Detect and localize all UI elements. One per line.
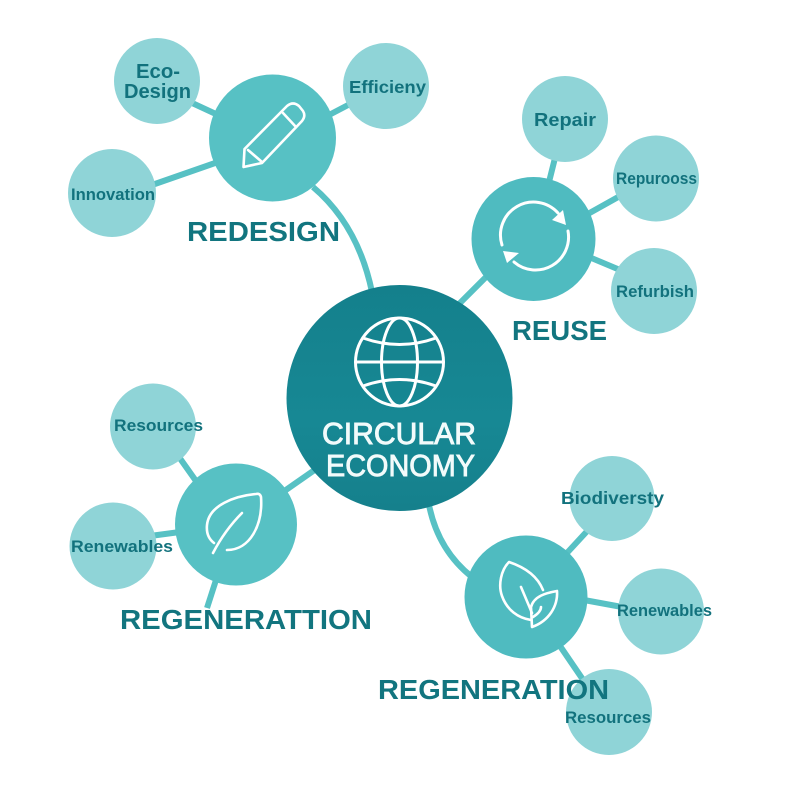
node: renewables	[70, 502, 173, 590]
node: innovation: Innovation	[71, 185, 155, 204]
heading: regeneration right: REGENERATION	[378, 674, 609, 705]
node: efficiency	[343, 43, 429, 129]
connector: renewables	[150, 532, 180, 536]
panel: regeneration branch left	[70, 384, 372, 635]
connector: reuse to centre	[455, 275, 488, 308]
connector: right hub to centre	[429, 505, 472, 577]
heading: redesign: REDESIGN	[187, 216, 340, 247]
node: refurbish	[611, 248, 697, 334]
connector: eco-design	[190, 102, 218, 115]
icon: leaf	[207, 494, 261, 553]
node: eco-design: Eco-	[136, 61, 180, 83]
icon: two leaves	[500, 562, 557, 627]
node: refurbish: Refurbish	[616, 282, 694, 301]
node: eco-design: Design	[124, 81, 191, 103]
heading: regeneration left: REGENERATTION	[120, 604, 372, 635]
node: repurpose	[613, 136, 699, 222]
connector: repurpose	[586, 196, 620, 215]
connector: repair	[549, 158, 555, 182]
heading: reuse: REUSE	[512, 315, 607, 346]
node: repair: Repair	[534, 109, 596, 130]
connector: biodiversity	[566, 528, 590, 554]
node: renewables: Renewables	[71, 537, 173, 556]
centre circle	[286, 285, 512, 511]
hub: regeneration right	[464, 536, 588, 658]
hub: redesign	[209, 74, 336, 202]
icon: globe	[356, 318, 444, 406]
connector: innovation	[152, 162, 218, 185]
node: biodiversity: Biodiversty	[561, 488, 664, 508]
connector: renewables	[584, 600, 622, 607]
icon: circular arrows	[500, 202, 569, 270]
node: repurpose: Repurooss	[616, 170, 697, 188]
connector: efficiency	[329, 104, 350, 115]
node: renewables	[617, 568, 712, 654]
connector: resources	[560, 646, 590, 690]
connector: resources	[179, 457, 196, 481]
connector: lower stub	[207, 580, 216, 608]
node: repair	[522, 76, 608, 162]
icon: pencil	[244, 104, 304, 167]
connector: left hub to centre	[283, 469, 316, 492]
title: circular economy: ECONOMY	[326, 448, 475, 483]
panel: reuse branch	[455, 76, 699, 346]
panel: circular economy centre	[286, 285, 512, 511]
panel: redesign branch	[68, 38, 429, 292]
node: efficiency: Efficieny	[349, 77, 426, 97]
title: circular economy: CIRCULAR	[322, 416, 476, 451]
node: resources	[110, 384, 203, 470]
node: resources: Resources	[114, 416, 203, 435]
node: biodiversity	[561, 456, 664, 541]
hub: reuse	[472, 177, 596, 301]
panel: regeneration branch right	[378, 456, 712, 755]
connector: redesign to centre	[313, 187, 372, 292]
node: innovation	[68, 149, 156, 237]
node: renewables: Renewables	[617, 602, 712, 620]
hub: regeneration left	[175, 464, 297, 586]
title: circular economy	[322, 416, 476, 483]
node: eco-design	[114, 38, 200, 124]
connector: refurbish	[589, 257, 620, 270]
node: resources	[565, 669, 652, 755]
node: resources: Resources	[565, 708, 651, 727]
